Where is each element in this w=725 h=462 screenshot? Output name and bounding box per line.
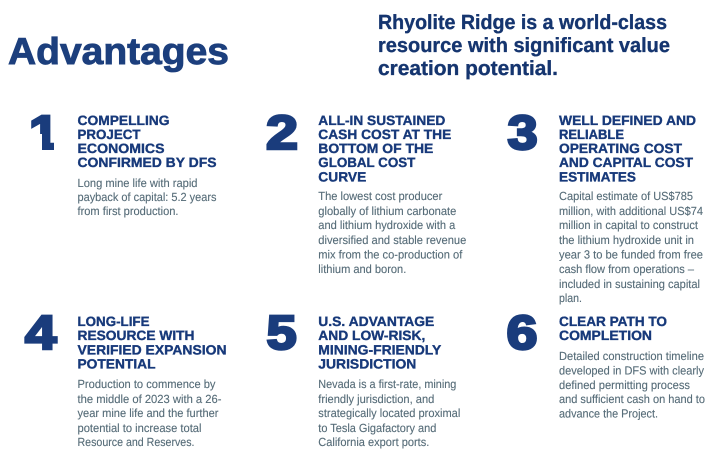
heading 3: RELIABLE (559, 127, 624, 142)
heading 5 (318, 314, 441, 372)
heading 1: ECONOMICS (78, 141, 164, 156)
heading 2: CASH COST AT THE (318, 127, 451, 142)
body text 3: year 3 to be funded from free (559, 248, 703, 262)
body text 1: payback of capital: 5.2 years (78, 190, 217, 204)
panel: advantage 6 (506, 307, 705, 420)
number 1: 1 (29, 107, 59, 160)
heading 1: CONFIRMED BY DFS (78, 155, 216, 170)
heading 4: RESOURCE WITH (78, 328, 194, 343)
heading 3: AND CAPITAL COST (559, 155, 694, 170)
panel: advantage 3 (508, 107, 703, 305)
heading 3: WELL DEFINED AND (559, 113, 696, 128)
panel: advantage 5 (266, 307, 460, 449)
heading 3 (559, 113, 696, 184)
body text 3: Capital estimate of US$785 (559, 189, 693, 203)
body text 3 (559, 189, 703, 305)
heading 1: COMPELLING (78, 113, 170, 128)
subtitle: Rhyolite Ridge is a world-class (378, 11, 667, 34)
body text 6: advance the Project. (559, 406, 658, 420)
body text 5: to Tesla Gigafactory and (318, 421, 436, 435)
heading 6: COMPLETION (559, 328, 652, 343)
body text 4: Resource and Reserves. (78, 435, 194, 449)
heading 2: GLOBAL COST (318, 155, 416, 170)
heading 2: BOTTOM OF THE (318, 141, 433, 156)
subtitle: resource with significant value (378, 34, 670, 57)
body text 3: million in capital to construct (559, 218, 699, 232)
body text 1 (78, 176, 217, 218)
number 3: 3 (508, 107, 538, 160)
heading 5: MINING-FRIENDLY (318, 342, 441, 358)
body text 2: and lithium hydroxide with a (318, 218, 456, 232)
heading 6 (559, 314, 667, 343)
body text 6 (559, 349, 705, 420)
panel: advantage 4 (25, 307, 226, 449)
body text 5 (318, 377, 460, 449)
number 6: 6 (506, 307, 537, 360)
body text 6: developed in DFS with clearly (559, 364, 704, 378)
body text 3: the lithium hydroxide unit in (559, 233, 694, 247)
heading 5: U.S. ADVANTAGE (318, 314, 434, 329)
subtitle (378, 11, 670, 80)
body text 5: California export ports. (318, 435, 429, 449)
heading 2: CURVE (318, 170, 366, 184)
heading 1 (78, 113, 216, 170)
body text 2: The lowest cost producer (318, 189, 442, 203)
body text 3: cash flow from operations – (559, 262, 694, 276)
body text 6: Detailed construction timeline (559, 349, 704, 363)
heading 5: AND LOW-RISK, (318, 328, 425, 343)
body text 1: Long mine life with rapid (78, 176, 198, 190)
body text 2: lithium and boron. (318, 262, 406, 276)
heading 4 (78, 314, 226, 372)
heading 3: ESTIMATES (559, 170, 636, 184)
heading 4: VERIFIED EXPANSION (78, 342, 226, 358)
number 2: 2 (266, 107, 298, 160)
body text 4: Production to commence by (78, 377, 216, 391)
body text 4: potential to increase total (78, 421, 202, 435)
body text 4: the middle of 2023 with a 26- (78, 392, 222, 406)
panel: advantage 1 (29, 107, 217, 218)
body text 2: mix from the co-production of (318, 248, 463, 262)
body text 2 (318, 189, 467, 276)
heading 2: ALL-IN SUSTAINED (318, 113, 446, 128)
heading 4: LONG-LIFE (78, 314, 150, 329)
body text 3: plan. (559, 291, 582, 305)
subtitle: creation potential. (378, 57, 558, 80)
number 5: 5 (266, 307, 297, 360)
title: Advantages (8, 30, 229, 72)
heading 6: CLEAR PATH TO (559, 314, 667, 329)
body text 5: strategically located proximal (318, 406, 460, 420)
body text 2: globally of lithium carbonate (318, 204, 457, 218)
panel: advantage 2 (266, 107, 467, 276)
body text 1: from first production. (78, 204, 178, 218)
body text 4 (78, 377, 222, 449)
body text 2: diversified and stable revenue (318, 233, 467, 247)
heading 2 (318, 113, 451, 184)
body text 3: million, with additional US$74 (559, 204, 703, 218)
body text 5: friendly jurisdiction, and (318, 392, 434, 406)
body text 5: Nevada is a first-rate, mining (318, 377, 456, 391)
body text 6: and sufficient cash on hand to (559, 392, 705, 406)
body text 6: defined permitting process (559, 378, 690, 392)
heading 3: OPERATING COST (559, 141, 683, 156)
heading 1: PROJECT (78, 127, 141, 142)
heading 5: JURISDICTION (318, 356, 416, 372)
number 4: 4 (25, 307, 57, 360)
heading 4: POTENTIAL (78, 356, 156, 372)
body text 3: included in sustaining capital (559, 277, 700, 291)
body text 4: year mine life and the further (78, 406, 219, 420)
